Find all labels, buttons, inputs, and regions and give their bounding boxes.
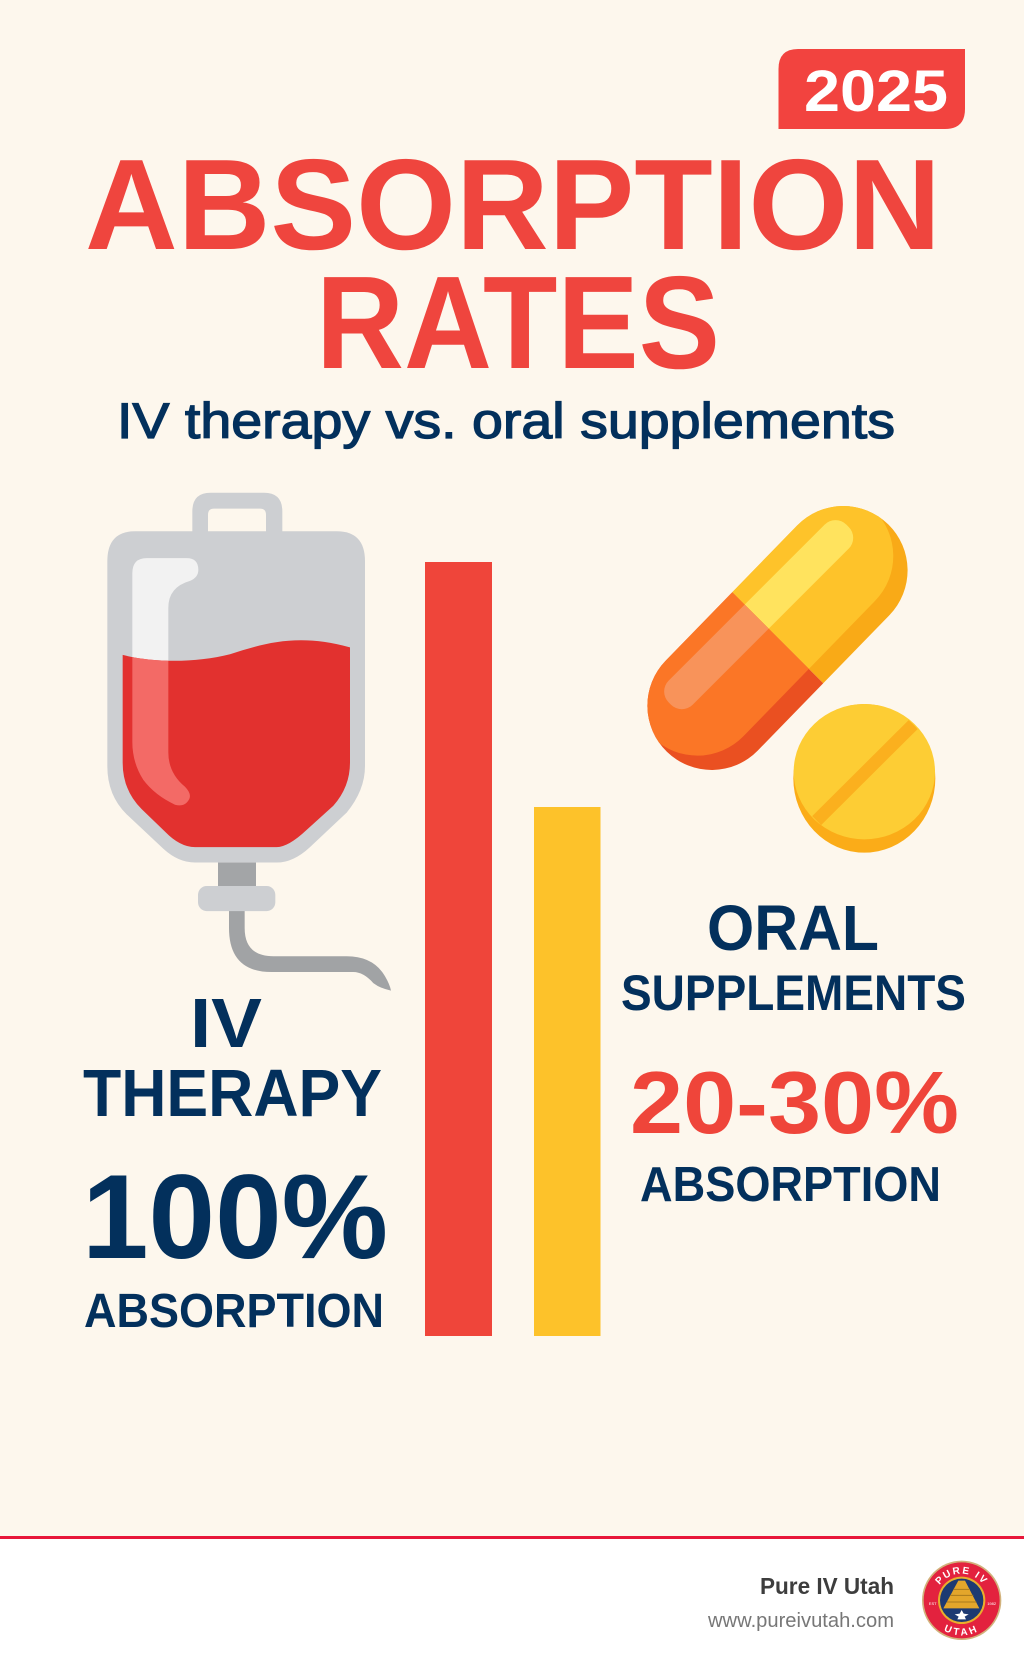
tablet: [793, 704, 935, 853]
bar chart: [425, 562, 600, 1336]
panel: IV therapy labels: ABSORPTION: [84, 1285, 384, 1338]
panel: oral supplements labels: ORAL: [707, 892, 879, 964]
capsule: [647, 506, 908, 770]
panel: oral supplements labels: SUPPLEMENTS: [621, 965, 966, 1021]
panel: IV therapy labels: IV: [190, 984, 262, 1062]
bag highlight: [132, 558, 198, 805]
bag neck: [218, 863, 256, 887]
panel: IV therapy labels: [82, 984, 388, 1338]
footer: [0, 1536, 1024, 1666]
panel: oral supplements labels: 20-30%: [630, 1053, 959, 1152]
year badge: [778, 49, 965, 129]
panel: oral supplements labels: [621, 892, 966, 1212]
title: ABSORPTION: [85, 133, 941, 277]
tube: [229, 909, 391, 991]
bag hanger: [192, 493, 282, 535]
bag body: [107, 531, 365, 863]
icon: pills: [647, 506, 936, 853]
logo: 1982: [987, 1601, 997, 1606]
title: [85, 133, 941, 396]
subtitle: IV therapy vs. oral supplements: [117, 393, 895, 449]
panel: IV therapy labels: THERAPY: [83, 1056, 382, 1131]
bar: oral supplements: [534, 807, 600, 1336]
bar: IV therapy: [425, 562, 492, 1336]
logo: PURE IV: [934, 1566, 988, 1584]
website: www.pureivutah.com: [707, 1610, 894, 1632]
logo: EST: [929, 1601, 937, 1606]
logo: [922, 1560, 1002, 1640]
clamp: [198, 886, 275, 911]
brand name: Pure IV Utah: [760, 1573, 894, 1599]
icon: IV bag: [107, 493, 391, 991]
panel: oral supplements labels: ABSORPTION: [640, 1158, 941, 1212]
panel: IV therapy labels: 100%: [82, 1150, 388, 1284]
liquid highlight: [132, 657, 190, 806]
red liquid: [123, 640, 350, 847]
logo: UTAH: [944, 1624, 977, 1636]
title: RATES: [316, 249, 720, 396]
year badge: 2025: [804, 59, 948, 124]
